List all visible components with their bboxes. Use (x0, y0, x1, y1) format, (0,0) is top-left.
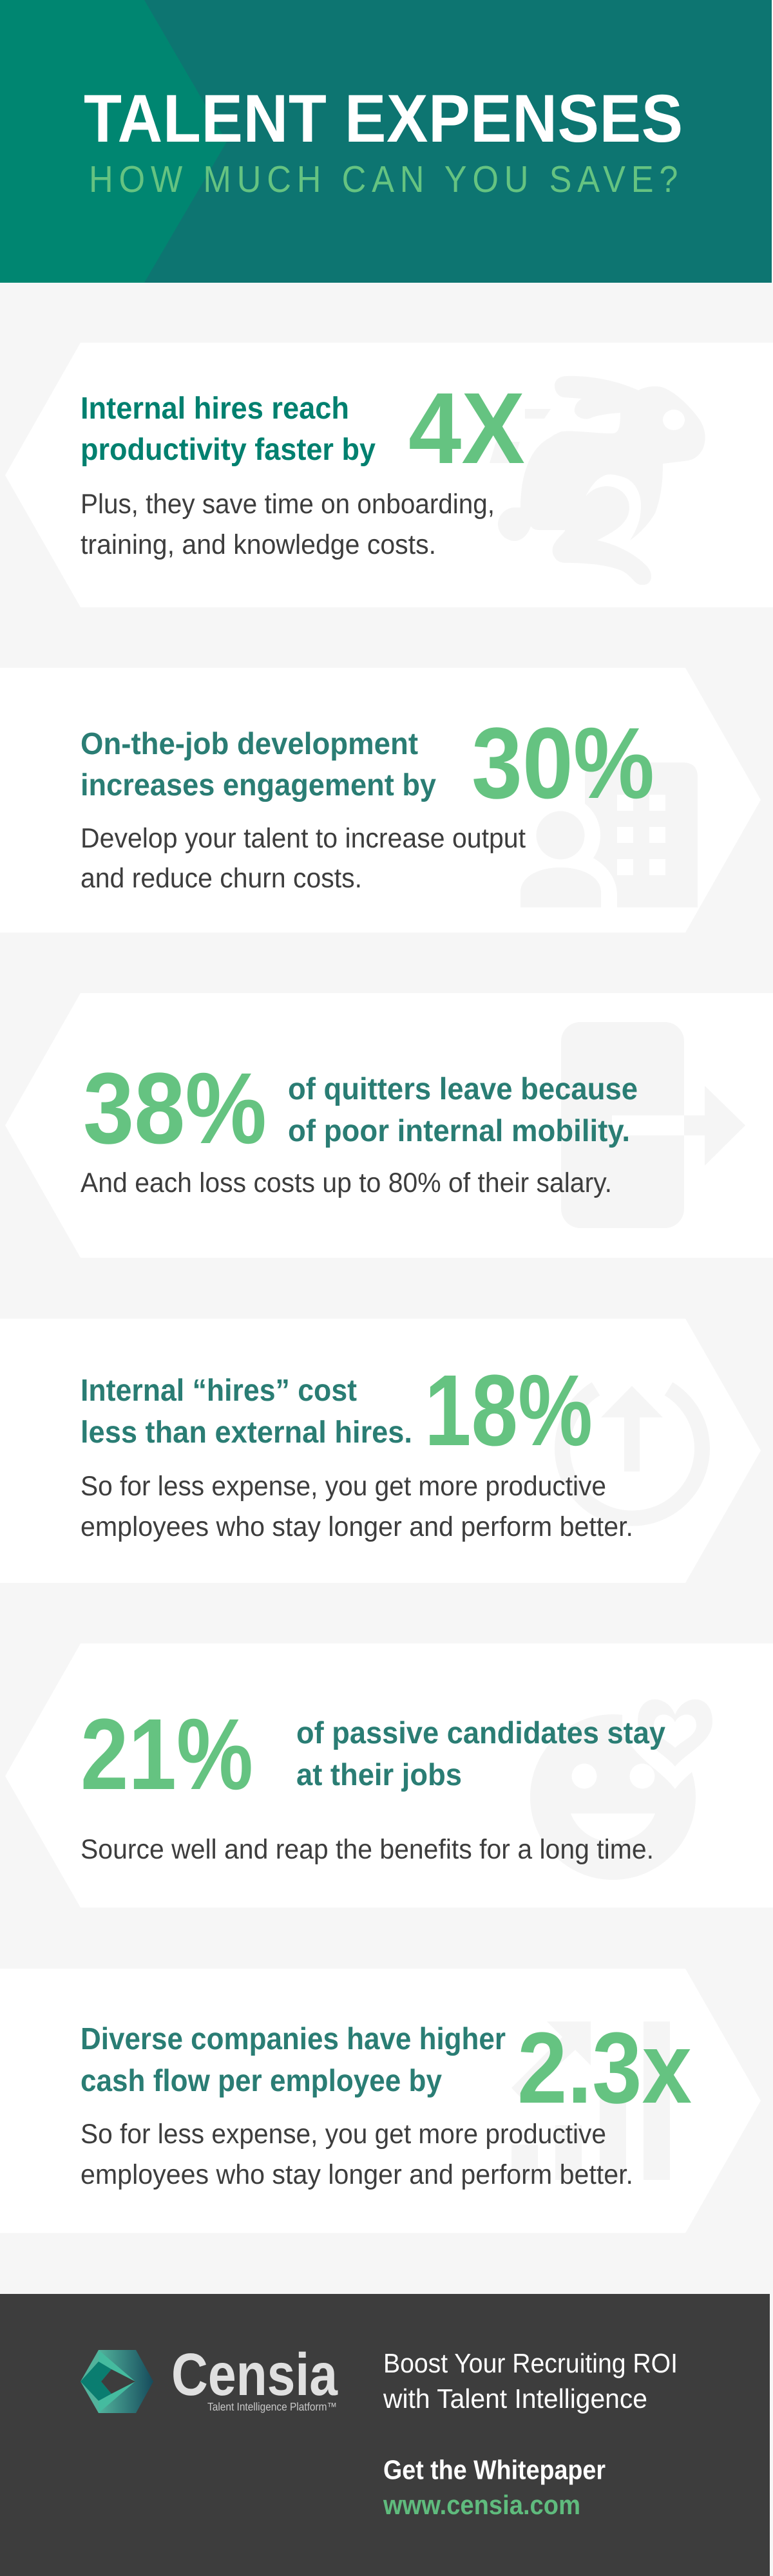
stat: 30%: 30% (472, 707, 654, 820)
icon: person and building (520, 762, 698, 907)
body text: and reduce churn costs. (81, 863, 362, 894)
panel: quitters (5, 993, 773, 1258)
footer (0, 2294, 770, 2576)
body text: Source well and reap the benefits for a long time. (81, 1834, 654, 1865)
body text: training, and knowledge costs. (81, 529, 436, 560)
call to action: Get the Whitepaper (383, 2455, 606, 2485)
body text (81, 2119, 633, 2190)
heading: at their jobs (296, 1758, 462, 1792)
heading (81, 1374, 412, 1450)
heading: less than external hires. (81, 1416, 412, 1450)
footer message (383, 2348, 678, 2414)
panel: internal hires (5, 343, 773, 607)
body text (81, 489, 495, 560)
stat: 21%: 21% (81, 1698, 253, 1811)
heading: of poor internal mobility. (288, 1114, 630, 1148)
body text: So for less expense, you get more productive (81, 1471, 606, 1502)
icon: exit door with arrow (561, 1022, 745, 1228)
panel: passive candidates (5, 1643, 773, 1908)
heading: Internal hires reach (81, 392, 349, 426)
icon: rising bars with arrow (511, 2022, 670, 2180)
panel: on-the-job development (0, 668, 761, 933)
stat: 4X: 4X (408, 372, 525, 485)
panel: diverse companies (0, 1969, 761, 2233)
heading (288, 1072, 638, 1148)
heading (81, 392, 376, 467)
stat: 2.3x: 2.3x (517, 2012, 692, 2125)
subtitle: HOW MUCH CAN YOU SAVE? (89, 158, 678, 200)
logo tagline: Talent Intelligence Platform™ (207, 2400, 337, 2413)
body text (81, 823, 526, 894)
heading: Internal “hires” cost (81, 1374, 357, 1408)
heading: of passive candidates stay (296, 1716, 665, 1750)
heading: cash flow per employee by (81, 2064, 442, 2098)
logo mark (81, 2350, 153, 2413)
heading (81, 2022, 506, 2098)
body text: Plus, they save time on onboarding, (81, 489, 495, 520)
footer message: Boost Your Recruiting ROI (383, 2348, 678, 2378)
body text: And each loss costs up to 80% of their salary. (81, 1168, 612, 1198)
heading: On-the-job development (81, 727, 418, 761)
footer message: with Talent Intelligence (383, 2383, 647, 2414)
body text (81, 1471, 633, 1542)
body text: employees who stay longer and perform better. (81, 1511, 633, 1542)
icon: power arrow up (562, 1386, 702, 1519)
stat: 38%: 38% (83, 1052, 267, 1165)
stat: 18%: 18% (425, 1354, 593, 1467)
heading: of quitters leave because (288, 1072, 638, 1106)
heading: increases engagement by (81, 768, 436, 802)
website link: www.censia.com (383, 2490, 580, 2520)
header banner (0, 0, 772, 283)
body text: employees who stay longer and perform better. (81, 2159, 633, 2190)
body text: So for less expense, you get more productive (81, 2119, 606, 2150)
heading (296, 1716, 665, 1792)
heading: productivity faster by (81, 433, 376, 467)
logo wordmark: Censia (171, 2341, 338, 2408)
panel: internal hire cost (0, 1319, 761, 1583)
icon: rabbit (490, 376, 705, 585)
heading: Diverse companies have higher (81, 2022, 506, 2056)
title: TALENT EXPENSES (84, 81, 683, 156)
body text: Develop your talent to increase output (81, 823, 526, 854)
heading (81, 727, 436, 802)
icon: smiley with heart (530, 1685, 728, 1880)
